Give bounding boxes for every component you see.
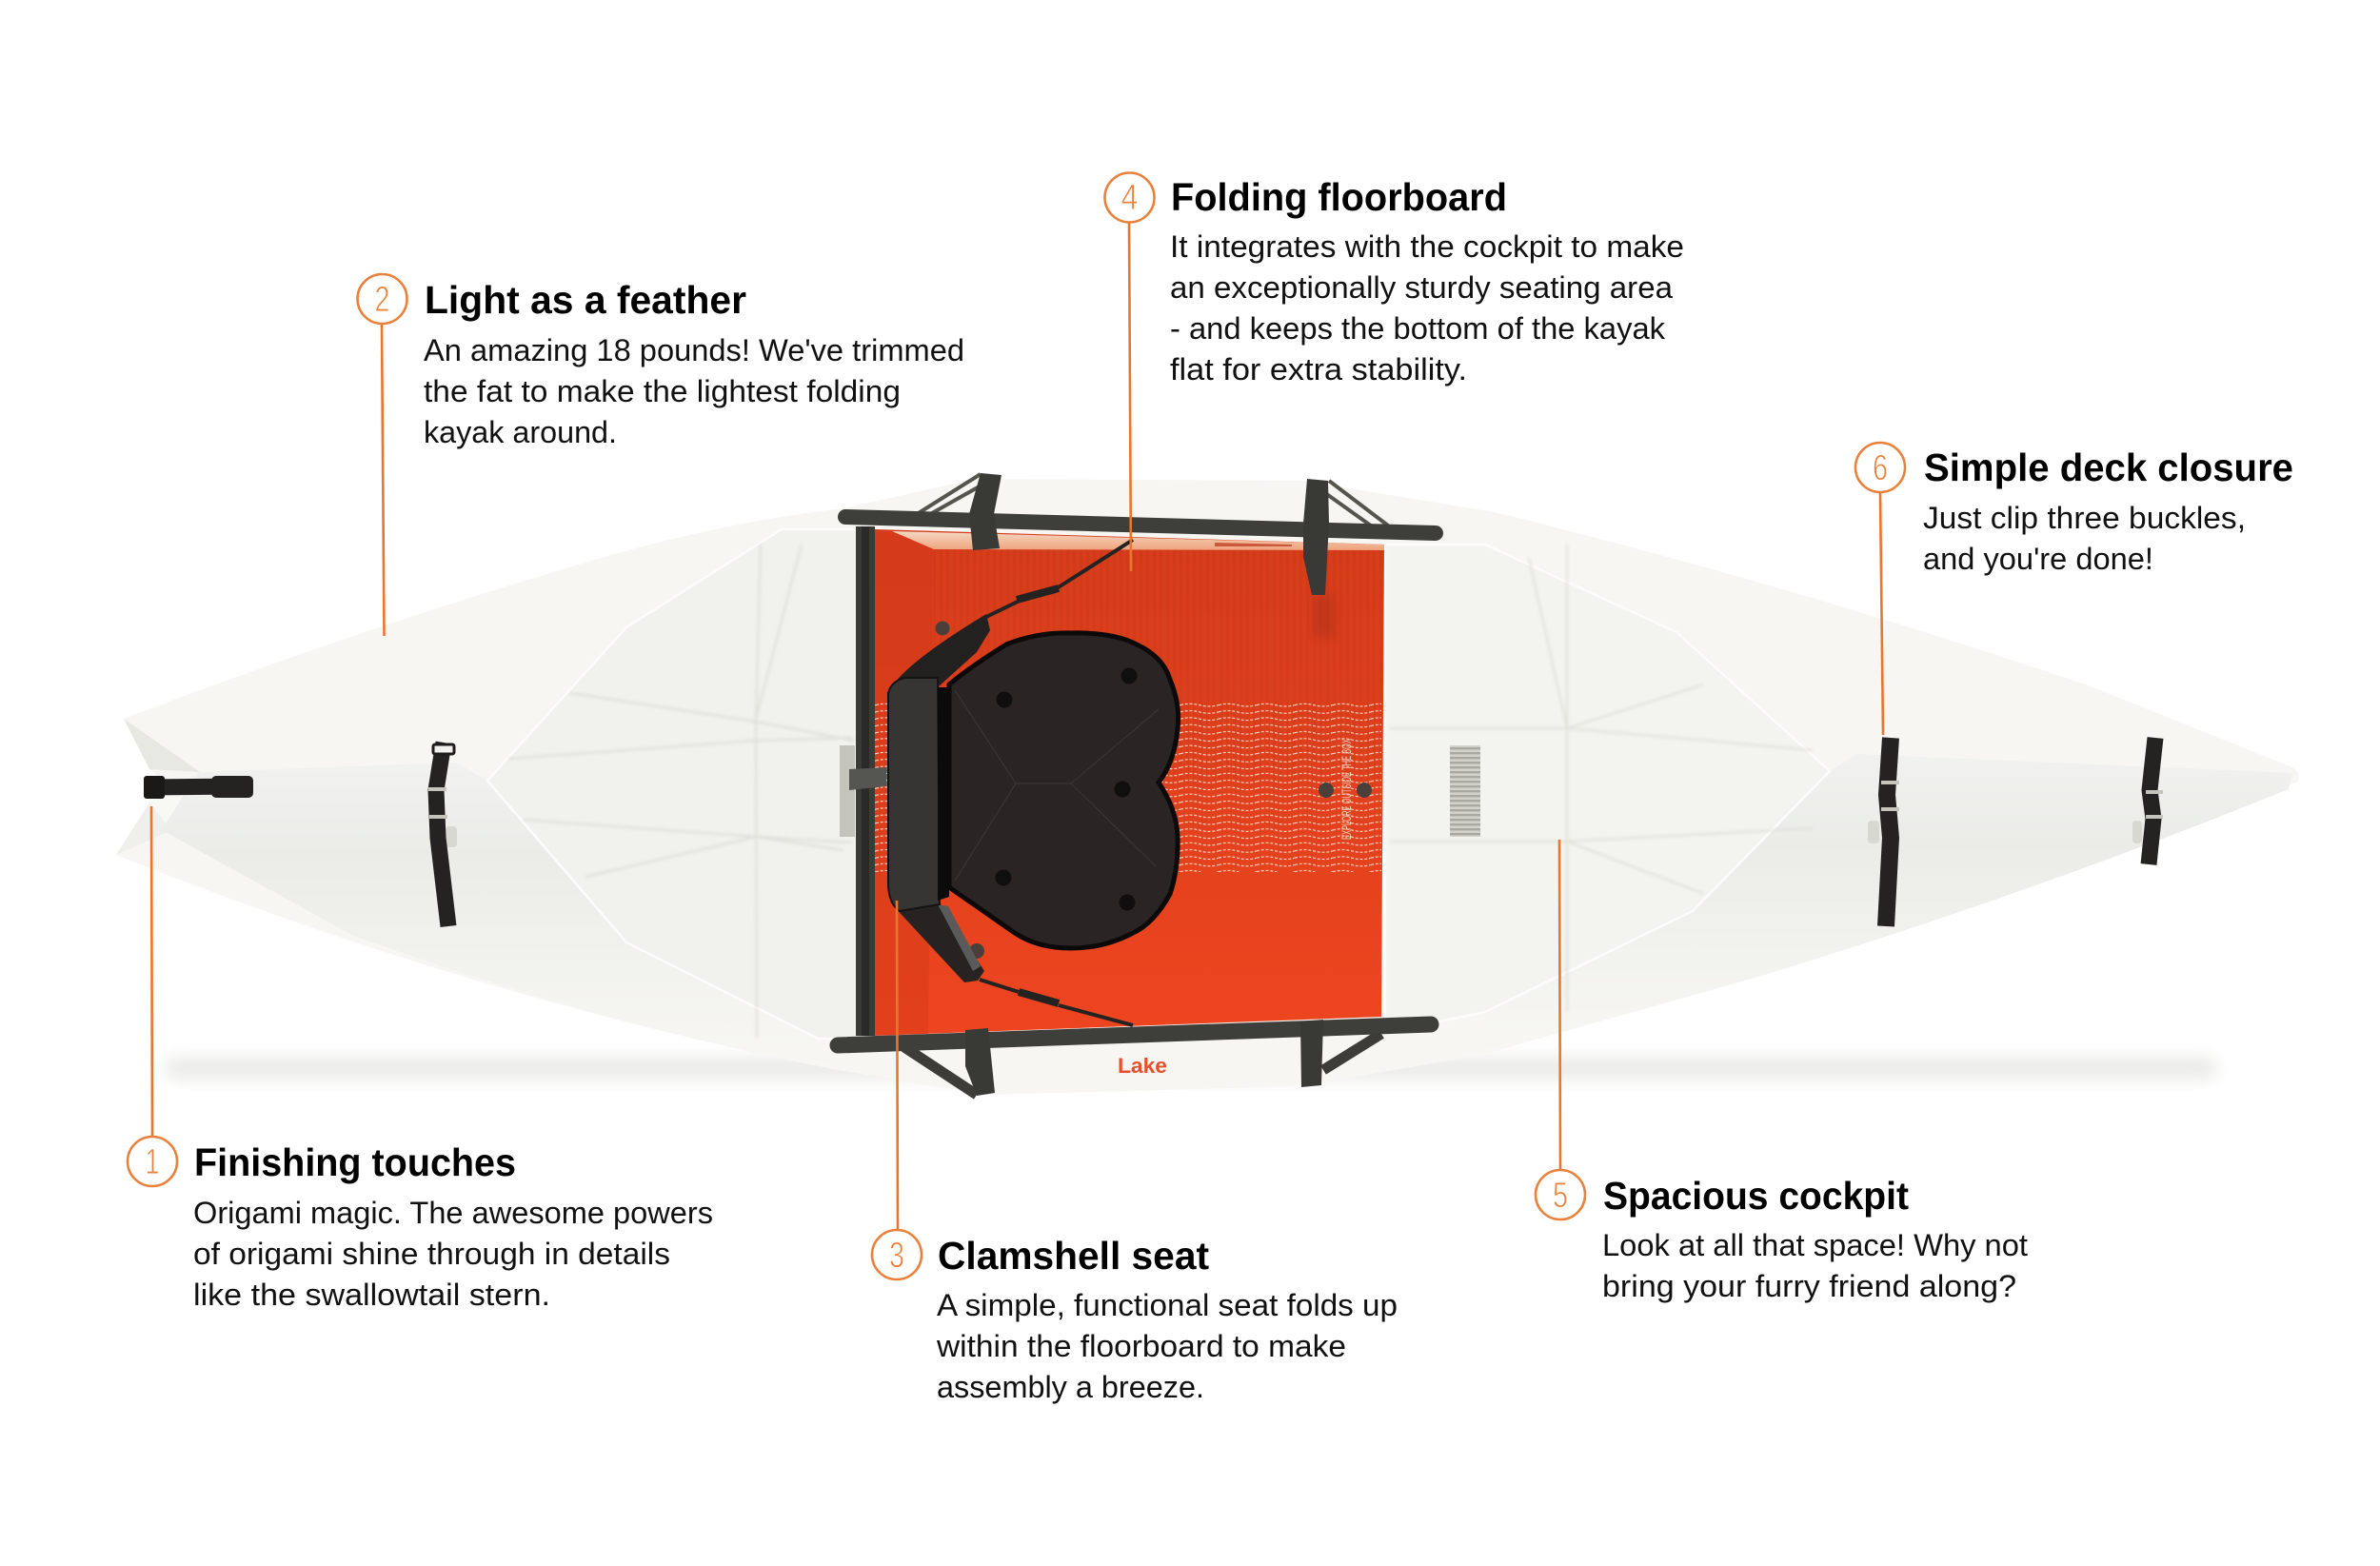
buckle strap fore bbox=[2132, 738, 2163, 864]
dotted wave pattern bbox=[873, 702, 1381, 872]
marker 6 bbox=[1855, 443, 1905, 492]
marker 4 bbox=[1104, 173, 1154, 223]
ground shadow bbox=[165, 1057, 2217, 1080]
body 1: Origami magic. The awesome powers bbox=[193, 1196, 713, 1230]
callout 3: Clamshell seat bbox=[872, 901, 1398, 1404]
body 2: An amazing 18 pounds! We've trimmed bbox=[424, 333, 964, 367]
body 5: bring your furry friend along? bbox=[1602, 1269, 2016, 1303]
body 1 bbox=[193, 1196, 713, 1312]
orange floorboard bbox=[872, 529, 1384, 1036]
heading 3: Clamshell seat bbox=[938, 1234, 1209, 1278]
side flaps bbox=[888, 614, 990, 693]
top rail bbox=[845, 517, 1436, 533]
leader line 6 bbox=[1880, 492, 1883, 735]
body 4: It integrates with the cockpit to make bbox=[1170, 229, 1684, 264]
Lake logo: Lake bbox=[1118, 1054, 1167, 1078]
heading 1: Finishing touches bbox=[194, 1140, 516, 1184]
marker 6: 6 bbox=[1873, 448, 1888, 488]
cushion snaps bbox=[996, 668, 1137, 910]
callout 6: Simple deck closure bbox=[1855, 443, 2293, 735]
callout 2: Light as a feather bbox=[358, 274, 964, 636]
top triangles bbox=[914, 474, 1388, 528]
callout 5: Spacious cockpit bbox=[1536, 840, 2028, 1303]
marker 5: 5 bbox=[1553, 1176, 1568, 1216]
marker 4: 4 bbox=[1121, 178, 1139, 218]
marker 3: 3 bbox=[889, 1236, 904, 1276]
aluminium frame bbox=[838, 473, 1436, 1096]
heading 5: Spacious cockpit bbox=[1603, 1174, 1909, 1218]
left lower flap bbox=[162, 763, 833, 1069]
grey hatch patches bbox=[840, 745, 1480, 837]
frame straps bbox=[965, 473, 1329, 1096]
leader line 5 bbox=[1559, 840, 1560, 1170]
floorboard rivets bbox=[935, 621, 1372, 959]
stern strap bbox=[144, 776, 253, 799]
body 2: the fat to make the lightest folding bbox=[424, 374, 901, 408]
leader line 2 bbox=[382, 324, 385, 636]
body 4 bbox=[1170, 229, 1684, 387]
rear deck strap bbox=[428, 743, 457, 926]
buckle strap mid bow bbox=[1868, 738, 1899, 926]
leader line 4 bbox=[1129, 223, 1131, 571]
body 6 bbox=[1923, 501, 2246, 576]
body 4: flat for extra stability. bbox=[1170, 352, 1467, 387]
cushion bbox=[949, 633, 1179, 948]
left translucent deck panel bbox=[487, 529, 862, 1039]
leader line 1 bbox=[151, 806, 152, 1137]
body 6: Just clip three buckles, bbox=[1923, 501, 2246, 535]
body 4: - and keeps the bottom of the kayak bbox=[1170, 311, 1666, 346]
callout 1: Finishing touches bbox=[128, 806, 713, 1312]
marker 2 bbox=[358, 274, 407, 324]
body 2: kayak around. bbox=[424, 415, 617, 449]
marker 5 bbox=[1536, 1170, 1585, 1219]
body 6: and you're done! bbox=[1923, 542, 2153, 576]
marker 2: 2 bbox=[375, 280, 390, 320]
marker 3 bbox=[872, 1230, 922, 1279]
stern tail folds bbox=[116, 719, 219, 855]
body 4: an exceptionally sturdy seating area bbox=[1170, 270, 1673, 305]
side clip bbox=[849, 767, 886, 790]
body 1: of origami shine through in details bbox=[193, 1237, 670, 1271]
bottom rail bbox=[838, 1024, 1431, 1045]
body 1: like the swallowtail stern. bbox=[193, 1278, 550, 1312]
callout 4: Folding floorboard bbox=[1104, 173, 1684, 571]
heading 2: Light as a feather bbox=[425, 278, 746, 322]
cushion seams bbox=[955, 690, 1159, 881]
body 3: within the floorboard to make bbox=[936, 1329, 1346, 1363]
marker 1 bbox=[128, 1137, 177, 1186]
seat straps bbox=[980, 540, 1133, 1025]
body 2 bbox=[424, 333, 964, 449]
leader line 3 bbox=[897, 901, 898, 1230]
left upright bbox=[856, 526, 875, 1036]
marker 1: 1 bbox=[145, 1142, 160, 1182]
right translucent deck panel bbox=[1385, 545, 1830, 1033]
hull body bbox=[116, 479, 2299, 1095]
body 5 bbox=[1602, 1228, 2028, 1303]
kayak bbox=[116, 473, 2299, 1096]
heading 6: Simple deck closure bbox=[1924, 446, 2293, 489]
bottom triangles bbox=[904, 1034, 1381, 1095]
clamshell seat bbox=[888, 614, 1179, 982]
bow lower flap bbox=[1485, 754, 2292, 1054]
body 3: A simple, functional seat folds up bbox=[937, 1288, 1398, 1322]
body 3: assembly a breeze. bbox=[937, 1370, 1204, 1404]
seat shadow bbox=[1314, 595, 1335, 638]
heading 4: Folding floorboard bbox=[1171, 175, 1507, 219]
floorboard lettering: EXPLORE OUTSIDE THE BOX bbox=[1339, 739, 1354, 840]
body 3 bbox=[936, 1288, 1398, 1404]
seat back bbox=[888, 678, 940, 911]
body 5: Look at all that space! Why not bbox=[1602, 1228, 2028, 1262]
